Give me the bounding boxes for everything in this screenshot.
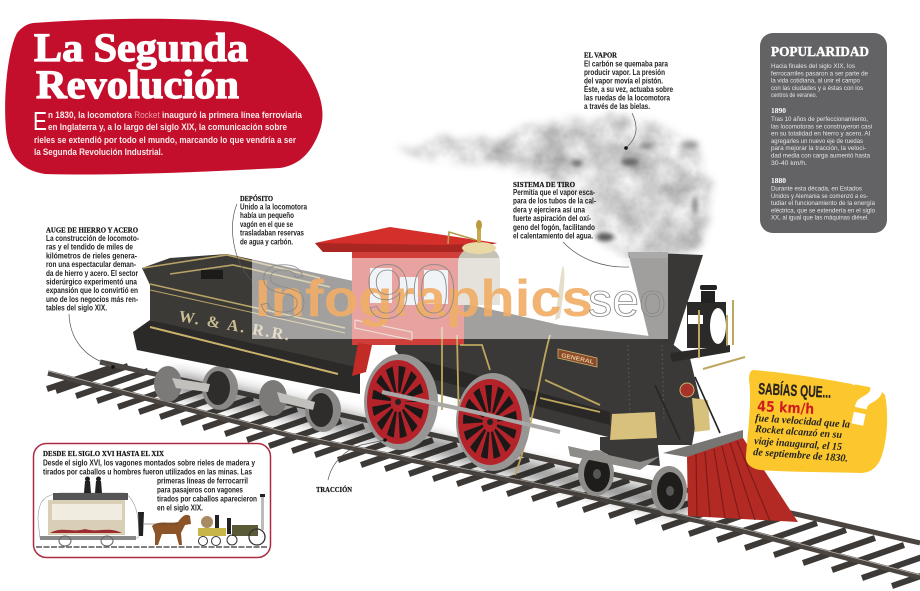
callout: tracción: TRACCIÓN [316,484,352,494]
connecting rod [382,392,560,432]
name plate: GENERAL [561,353,594,366]
title panel [5,19,322,175]
driving wheel rear [364,354,438,450]
callout: auge de hierro y acero: ron una espectacular deman- [46,260,136,269]
callout: sistema de tiro [513,180,629,267]
cowcatcher [663,430,798,522]
small cart and engine [198,494,265,546]
1880 entry: Unidos y Alemania se comenzó a es- [771,193,868,200]
sabías que heading: SABÍAS QUE... [758,379,832,402]
popularidad intro [771,63,868,99]
1890 entry: 1890 [771,106,786,115]
1890 entry [771,106,872,167]
intro text: en Inglaterra y, a lo largo del siglo XIX, la comunicación sobre [48,122,287,133]
sabías que text: fue la velocidad que la [755,413,850,431]
cylinder and sand box [568,377,720,470]
callout: el vapor: El carbón se quemaba para [584,60,668,68]
callout: auge de hierro y acero: tables del siglo XIX. [46,304,107,313]
boiler [395,265,700,445]
sabías que text: viaje inaugural, el 15 [754,436,842,453]
sabías que text: de septiembre de 1830. [753,447,848,465]
inset text: en el siglo XIX. [157,504,203,512]
callout: auge de hierro y acero: ras y el tendido de miles de [46,243,134,252]
headlamp [670,285,745,369]
callout: el vapor [584,50,673,150]
callout: depósito: vagón en el que se [240,220,293,229]
tender: W. & A. R.R. [177,308,291,344]
smoke shading [571,142,698,241]
1880 entry: Durante esta década, en Estados [771,186,862,192]
watermark: Infographics [255,270,593,328]
callout: el vapor: Éste, a su vez, actuaba sobre [584,85,673,94]
popularidad intro: centros de veraneo. [771,92,817,99]
callout: sistema de tiro: geno del fogón, facilitando [513,223,595,232]
tender [133,254,362,394]
callout: el vapor: EL VAPOR [584,50,617,60]
smoke cloud [395,115,710,262]
callout: depósito: Unido a la locomotora [240,202,307,212]
callout: depósito: DEPÓSITO [240,193,273,203]
popularidad heading: POPULARIDAD [771,45,869,60]
callout: auge de hierro y acero: La construcción de locomoto- [46,234,139,243]
front truck wheels [578,450,687,514]
driving wheel front [456,373,530,471]
callout: auge de hierro y acero: kilómetros de rieles genera- [46,251,137,260]
shadow under train [170,372,700,515]
1880 entry: eléctrica, que se extendería en el siglo [771,207,875,214]
inset text: primeras líneas de ferrocarril [157,476,248,486]
callout: auge de hierro y acero: AUGE DE HIERRO Y ACERO [46,226,138,235]
intro text [33,106,303,158]
watermark: 90 [365,250,457,335]
intro text: rieles se extendió por todo el mundo, marcando lo que vendría a ser [34,135,296,146]
1880 entry [771,176,875,222]
railway track [47,362,920,586]
panel: desde el siglo XVI [34,444,270,558]
callout: sistema de tiro: dera y ejerciera así una [513,205,585,214]
watermark: S [258,250,307,333]
1890 entry: las locomotoras se construyeron casi [771,123,872,130]
callout: el vapor: producir vapor. La presión [584,68,665,77]
1890 entry: 30-40 km/h. [771,160,807,167]
popularidad intro: Hacia finales del siglo XIX, los [771,63,855,70]
intro text: n 1830, la locomotora Rocket inauguró la primera línea ferroviaria [48,110,303,121]
watermark: seo [588,274,666,326]
horse-drawn passenger car [38,476,144,546]
intro text: la Segunda Revolución Industrial. [34,147,163,158]
tender wheels [154,366,341,432]
title: Revolución [36,62,239,107]
inset heading: DESDE EL SIGLO XVI HASTA EL XIX [43,449,164,458]
popularidad intro: ferrocarriles pasaron a ser parte de [771,70,868,77]
callout: depósito: había un pequeño [240,211,294,220]
1890 entry: agregarles un nuevo eje de ruedas [771,138,863,145]
popularidad intro: la vida cotidiana, al unir el campo [771,78,860,85]
callout: sistema de tiro: SISTEMA DE TIRO [513,180,575,189]
1880 entry: XX, al igual que las máquinas diésel. [771,215,869,222]
callout: depósito [232,193,307,281]
callout: auge de hierro y acero: uno de los negocios más ren- [46,295,138,304]
callout: sistema de tiro: fuerte aspiración del oxí- [513,214,591,223]
1880 entry: tudiar el funcionamiento de la energía [771,200,875,207]
callout: sistema de tiro: Permitía que el vapor esca- [513,188,595,197]
callout: sistema de tiro: el calentamiento del agua. [513,232,593,240]
callout: tracción [316,438,387,494]
panel: sabías que [746,360,892,473]
panel: popularidad [760,33,887,233]
inset text: tirados por caballos u hombres fueron utilizados en las minas. Las [43,468,253,476]
question mark: ? [837,360,892,446]
callout: auge de hierro y acero: siderúrgico experimentó una [46,278,138,286]
sabías que text: Rocket alcanzó en su [754,424,842,441]
callout: sistema de tiro: para de los tubos de la cal- [513,197,596,206]
1890 entry: dad media con carga aumentó hasta [771,152,870,160]
1890 entry: en su totalidad en hierro y acero. Al [771,131,870,138]
inset text: tirados por caballos aparecieron [157,494,257,504]
name plate [558,349,597,367]
horse [144,515,191,545]
steam dome and whistle [448,220,500,305]
callout: el vapor: del vapor movía el pistón. [584,76,663,86]
brass pipes [442,327,600,475]
1890 entry: Tras 10 años de perfeccionamiento, [771,116,868,123]
popularidad intro: con las ciudades y a éstas con los [771,85,863,92]
inset rail [36,546,268,548]
title: La Segunda [34,25,248,70]
sabías que text [753,413,850,465]
smokestack [628,252,703,347]
callout: auge de hierro y acero: expansión que lo convirtió en [46,286,138,295]
cab [315,227,497,376]
1890 entry: para mejorar la tracción, la veloci- [771,145,866,152]
callout: auge de hierro y acero [46,226,139,369]
inset text: para pasajeros con vagones [157,486,243,494]
callout: el vapor: a través de las bielas. [584,102,650,111]
45 km/h: 45 km/h [757,399,815,418]
watermark [252,250,668,339]
callout: depósito: de agua y carbón. [240,237,293,246]
title [34,25,248,107]
callout: depósito: trasladaban reservas [240,229,304,238]
callout: auge de hierro y acero: da de hierro y acero. El sector [46,269,138,278]
inset text: Desde el siglo XVI, los vagones montados sobre rieles de madera y [43,458,256,468]
callout: el vapor: las ruedas de la locomotora [584,94,670,102]
intro text: E [33,106,47,136]
1880 entry: 1880 [771,176,786,185]
inset text [43,458,257,512]
